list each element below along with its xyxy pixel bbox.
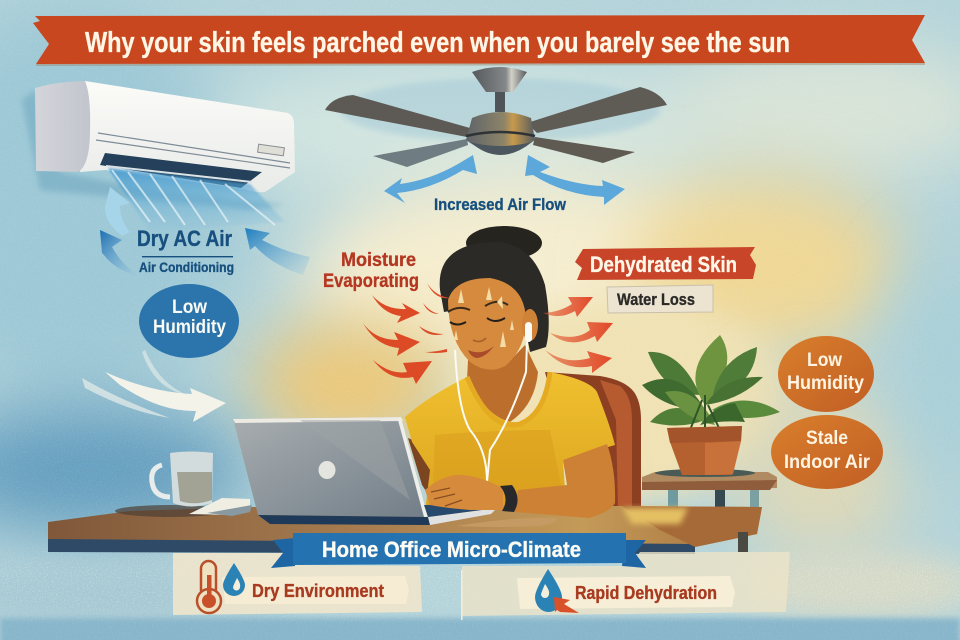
bottom cream panels xyxy=(173,552,790,620)
ceiling fan xyxy=(325,67,667,167)
badge: Low Humidity orange: Humidity xyxy=(787,373,864,394)
arrow: fan airflow left xyxy=(384,155,477,203)
arrow: right AC airflow xyxy=(245,228,310,275)
banner: Home Office Micro-Climate: Home Office Micro-Climate xyxy=(322,537,581,562)
t-shirt xyxy=(405,372,615,512)
face xyxy=(448,278,538,370)
label: Dry AC Air: Air Conditioning xyxy=(139,259,234,275)
hair xyxy=(440,226,549,352)
strip: Rapid Dehydration xyxy=(517,569,735,613)
badge: Low Humidity blue xyxy=(139,284,239,358)
strip: Rapid Dehydration: Rapid Dehydration xyxy=(575,583,717,603)
icon: thermometer xyxy=(197,561,221,613)
leaves xyxy=(642,335,780,430)
label: Dehydrated Skin ribbon: Dehydrated Skin xyxy=(590,252,737,277)
potted plant xyxy=(642,335,780,475)
woman at desk xyxy=(405,226,615,512)
arrows: moisture evaporating left xyxy=(363,283,450,384)
badge: Low Humidity blue: Low xyxy=(172,297,207,318)
title ribbon xyxy=(33,15,925,66)
label: Increased Air Flow: Increased Air Flow xyxy=(434,195,567,214)
forearm, hand and wristwatch xyxy=(425,444,615,518)
label: Dry AC Air xyxy=(137,226,234,275)
side table xyxy=(642,469,777,512)
coffee mug xyxy=(115,452,225,517)
label: Moisture Evaporating xyxy=(323,250,419,292)
far arm xyxy=(408,438,432,500)
badge: Low Humidity blue: Humidity xyxy=(153,317,226,338)
icon: water drop with arrow xyxy=(535,569,579,613)
badge: Stale Indoor Air: Indoor Air xyxy=(784,452,871,473)
arrow: left AC airflow xyxy=(100,187,140,277)
strip: Dry Environment xyxy=(197,561,409,613)
cold air streams xyxy=(108,168,285,232)
earphones xyxy=(455,322,532,482)
strip: Dry Environment: Dry Environment xyxy=(252,581,384,601)
badge: Low Humidity orange: Low xyxy=(807,350,842,371)
title ribbon: Why your skin feels parched even when you barely see the sun xyxy=(85,27,790,59)
papers on desk xyxy=(189,498,252,516)
badge: Low Humidity orange xyxy=(778,336,874,412)
banner: Home Office Micro-Climate xyxy=(271,533,646,568)
label: Moisture Evaporating: Moisture xyxy=(341,250,416,271)
arrow: fan airflow right xyxy=(525,155,625,205)
laptop xyxy=(233,417,557,527)
label: Dry AC Air: Dry AC Air xyxy=(137,226,232,251)
badge: Stale Indoor Air xyxy=(771,415,883,489)
terracotta pot xyxy=(667,426,742,475)
air conditioner xyxy=(22,81,295,210)
label: Moisture Evaporating: Evaporating xyxy=(323,271,419,292)
icon: water drop xyxy=(223,563,245,596)
sweat drops xyxy=(454,287,514,347)
badge: Stale Indoor Air: Stale xyxy=(806,428,848,449)
chair xyxy=(545,372,641,510)
label: Water Loss card: Water Loss xyxy=(617,290,695,309)
arrows: water loss right xyxy=(543,297,613,373)
label: Dehydrated Skin ribbon xyxy=(575,247,756,280)
arrow: white air current xyxy=(82,350,226,422)
desk xyxy=(48,506,762,554)
neck xyxy=(467,345,538,422)
label: Water Loss card xyxy=(607,285,713,313)
